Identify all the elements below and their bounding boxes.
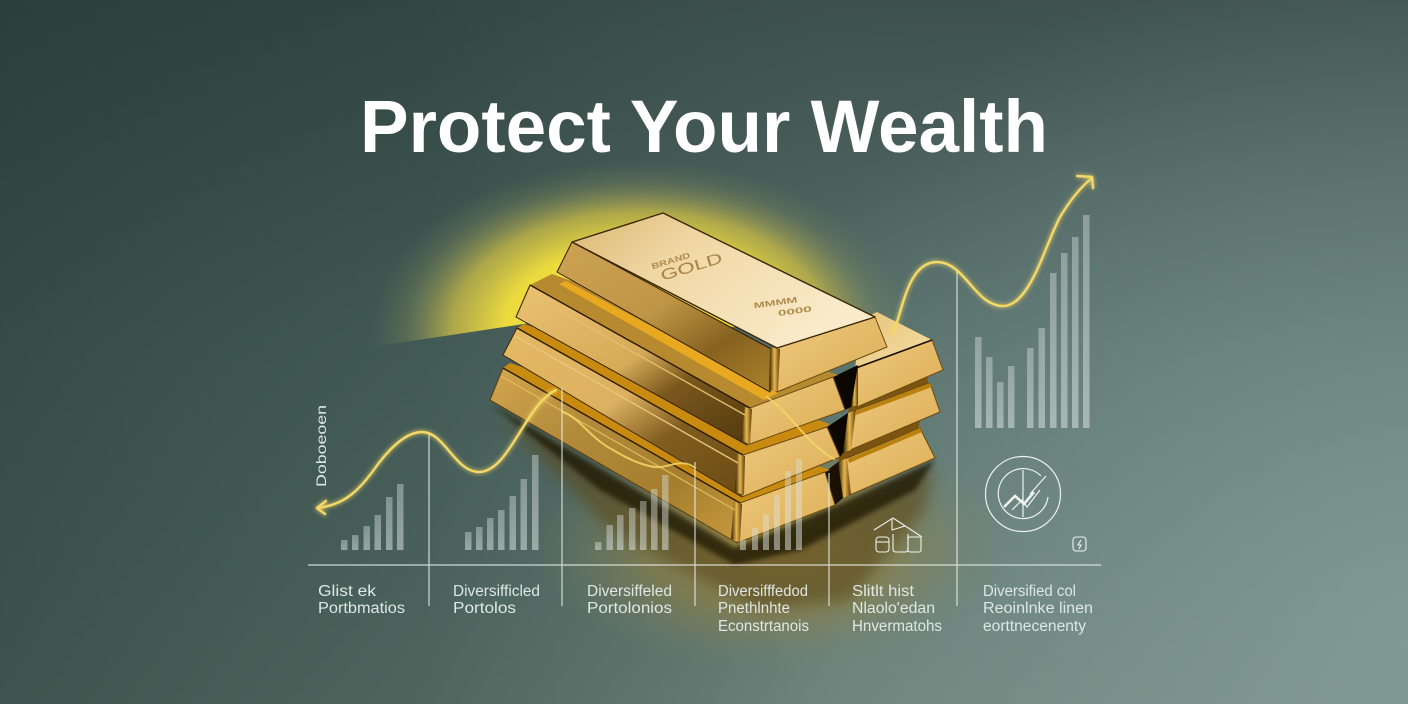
- bars: chart 2: [465, 455, 538, 550]
- label: column 5: Hnvermatohs: [852, 618, 942, 635]
- top bar: [557, 213, 887, 392]
- label: column 6: eorttnecenenty: [983, 618, 1086, 635]
- label: column 4: Econstrtanois: [718, 618, 809, 635]
- vertical axis label: Doboeoen: [313, 405, 329, 487]
- label: column 5: Slitlt hist: [852, 583, 915, 600]
- label: column 2: Diversifficled: [453, 583, 540, 600]
- bars: chart 1: [341, 484, 404, 550]
- bars: chart 3: [595, 475, 668, 550]
- bar stamp: lower marks: 0000: [777, 304, 813, 318]
- label: column 4: [718, 583, 809, 635]
- trend line and arrows: [317, 176, 1093, 514]
- dark gaps: [833, 365, 858, 410]
- label: column 5: [852, 583, 942, 635]
- stack backing: [838, 345, 928, 498]
- gold bars stack: [490, 213, 943, 543]
- label: column 4: Diversifffedod: [718, 583, 808, 600]
- middle faint curve: [563, 412, 695, 468]
- left stack: third bar: [503, 324, 840, 497]
- label: column 3: Portolonios: [587, 600, 672, 617]
- label: column 2: [453, 583, 540, 617]
- icon: small badge: [1073, 537, 1086, 551]
- label: column 3: [587, 583, 672, 617]
- bar stamp: lower marks: MMMM: [753, 295, 798, 310]
- bars: chart 4: [740, 459, 802, 550]
- label: column 4: Pnethlnhte: [718, 600, 790, 617]
- bar stamp: GOLD: BRAND: [650, 251, 692, 271]
- label: column 1: [318, 583, 405, 617]
- left trend curve with arrow: [317, 390, 556, 514]
- left stack: second bar: [516, 274, 845, 445]
- translucent bar charts: [341, 215, 1090, 550]
- bar stamp: GOLD: GOLD: [659, 250, 725, 285]
- gold reflection on table: [492, 405, 1005, 670]
- label: column 6: [983, 583, 1093, 635]
- curve across bars: [767, 397, 834, 459]
- right stack: top bar: [851, 312, 943, 407]
- bar stamp: GOLD: [650, 242, 725, 286]
- yellow glow behind gold: [386, 170, 883, 344]
- label: column 6: Reoinlnke linen: [983, 600, 1093, 617]
- label: column 5: Nlaolo'edan: [852, 600, 935, 617]
- label: column 3: Diversiffeled: [587, 583, 672, 600]
- label: column 6: Diversified col: [983, 583, 1076, 600]
- column labels: [318, 583, 1093, 635]
- icon: circular chart badge: [986, 456, 1060, 532]
- right trend curve with arrow: [892, 176, 1093, 333]
- bars: chart 5: [975, 215, 1090, 428]
- icon: house and containers: [874, 518, 922, 552]
- title: Protect Your Wealth: [360, 85, 1048, 168]
- left stack: bottom bar: [490, 363, 835, 543]
- label: column 2: Portolos: [453, 600, 516, 617]
- grid lines: [308, 270, 1101, 606]
- label: column 1: Glist ek: [318, 583, 376, 600]
- right stack: bottom bar: [838, 428, 935, 498]
- label: column 1: Portbmatios: [318, 600, 405, 617]
- bar stamp: lower marks: [753, 293, 813, 321]
- right stack: middle bar: [843, 383, 940, 453]
